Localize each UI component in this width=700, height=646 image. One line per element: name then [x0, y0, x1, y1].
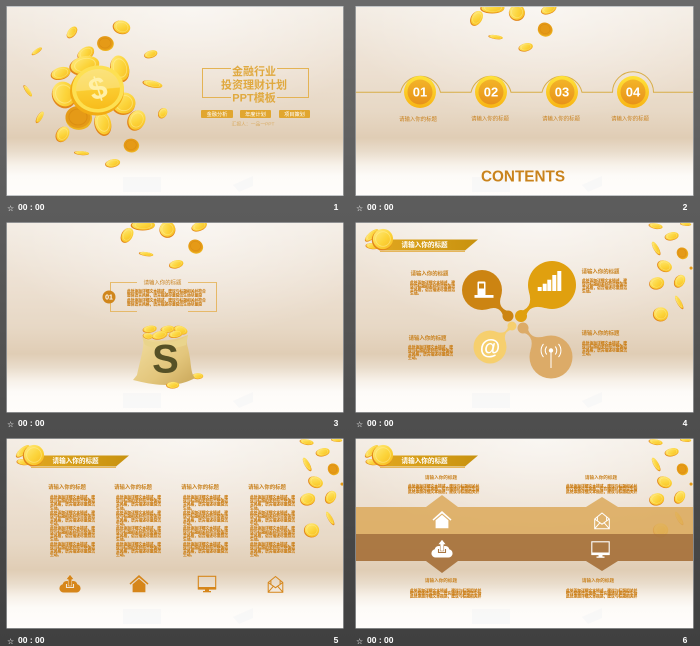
- footer slide 3: ☆: [7, 420, 14, 429]
- panel: slide 1 cover: [6, 6, 344, 197]
- bubble: at sign: @: [480, 336, 500, 360]
- text block top left: 生动。: [410, 290, 421, 296]
- footer slide 3: [7, 418, 339, 429]
- column 4 text: 言风格，语言描述尽量简洁: [250, 533, 295, 538]
- frame body text: 此处添加详细文本描述，建议与标题相关并符合: [127, 290, 206, 294]
- footer slide 6: [356, 635, 688, 646]
- column 2 text: 生动。: [116, 505, 127, 510]
- footer slide 3: 00 : 00: [18, 418, 45, 428]
- text block bottom right: [582, 329, 627, 356]
- item 02: 02: [484, 84, 498, 100]
- column 2 text: 生动。: [116, 536, 127, 542]
- text block top right: 符合整体语言风格，语言描述尽量简洁生动: [566, 486, 638, 491]
- item 04: [611, 76, 649, 122]
- text block top left: [408, 474, 480, 494]
- item 02: [471, 76, 509, 122]
- footer slide 6: 6: [683, 635, 688, 645]
- text block bottom left: 生动。: [408, 355, 419, 360]
- text block top left: 符合整体语言风格，语言描述尽量简洁生动: [408, 486, 480, 491]
- text block bottom left: 议与标题相关并符合整体语: [408, 348, 453, 353]
- column 4 text: 生动。: [250, 521, 261, 526]
- panel: slide 5 four columns: [6, 438, 344, 629]
- header ribbon: [363, 443, 478, 468]
- text block bottom right: 生动。: [582, 351, 593, 356]
- column 3 text: 议与标题相关并符合整体语: [183, 545, 228, 550]
- column 3 text: 生动。: [183, 552, 194, 557]
- item 01: 01: [413, 84, 427, 100]
- footer slide 1: 00 : 00: [18, 202, 45, 212]
- icon: money bag: [133, 324, 203, 389]
- column 2 text: 言风格，语言描述尽量简洁: [116, 548, 161, 554]
- column 2 text: 议与标题相关并符合整体语: [116, 529, 161, 534]
- text block bottom left: [410, 577, 482, 598]
- icon: home: [130, 575, 148, 592]
- column 3 text: 生动。: [183, 521, 194, 526]
- text block bottom right: 此处添加详细文本描述，建: [582, 342, 627, 346]
- text block bottom left: 此处添加详细文本描述，建: [408, 346, 453, 350]
- text block top right: 请输入你的标题: [582, 268, 620, 276]
- footer slide 4: ☆: [356, 420, 363, 429]
- text block top right: 此处添加详细文本描述，建议与标题相关并: [566, 484, 637, 488]
- column 4 text: 此处添加详细文本描述，建: [250, 541, 295, 546]
- text block bottom right: 此处添加详细文本描述，建议与标题相关并: [566, 589, 637, 593]
- text block top left: 此处添加详细文本描述，建: [410, 281, 455, 285]
- coin cluster illustration: $: [84, 69, 111, 108]
- icon: home: [432, 511, 452, 528]
- light band with diamonds: [356, 495, 693, 534]
- column 1 text: 议与标题相关并符合整体语: [50, 545, 95, 550]
- column 1 text: 言风格，语言描述尽量简洁: [50, 533, 95, 538]
- column 4 text: 议与标题相关并符合整体语: [250, 498, 295, 503]
- column 4 text: 言风格，语言描述尽量简洁: [250, 502, 295, 507]
- panel: slide 3 money bag: [6, 219, 344, 413]
- text block top right: 议与标题相关并符合整体语: [582, 282, 627, 286]
- text block top right: 此处添加详细文本描述，建: [582, 279, 627, 283]
- cover title box: 金融行业: [232, 64, 276, 78]
- column 3 text: 言风格，语言描述尽量简洁: [183, 533, 228, 538]
- column 3 text: [181, 483, 228, 557]
- column 3 text: 言风格，语言描述尽量简洁: [183, 502, 228, 507]
- item 04: 04: [626, 84, 641, 100]
- text block top left: 言风格，语言描述尽量简洁: [410, 287, 455, 292]
- text block top left: 议与标题相关并符合整体语: [410, 284, 455, 288]
- corner coins: [648, 438, 693, 539]
- cover title box: PPT模板: [232, 90, 276, 104]
- text block top right: 言风格，语言描述尽量简洁: [582, 285, 627, 290]
- header ribbon: 请输入你的标题: [402, 240, 448, 249]
- column 2 text: 言风格，语言描述尽量简洁: [116, 533, 161, 538]
- column 1 text: 议与标题相关并符合整体语: [50, 529, 95, 534]
- column 2 text: 请输入你的标题: [114, 483, 152, 491]
- column 1 text: 议与标题相关并符合整体语: [50, 498, 95, 503]
- bubble: phone: [462, 270, 514, 322]
- column 4 text: [248, 483, 295, 557]
- panel: slide 2 contents: [356, 2, 694, 197]
- bubble: signal bars: [515, 261, 576, 322]
- footer slide 3: 3: [334, 418, 339, 428]
- header ribbon: 请输入你的标题: [52, 456, 99, 465]
- column 4 text: 请输入你的标题: [248, 483, 286, 491]
- column 3 text: 言风格，语言描述尽量简洁: [183, 517, 228, 522]
- column 1 text: [48, 483, 95, 557]
- column 1 text: 此处添加详细文本描述，建: [50, 541, 95, 546]
- heading: contents: CONTENTS: [481, 168, 565, 186]
- dark band with diamonds: [356, 534, 693, 573]
- column 1 text: 生动。: [50, 536, 61, 542]
- footer slide 2: 00 : 00: [367, 202, 394, 212]
- frame body text: 此处添加详细文本描述，建议与标题相关并符合: [127, 298, 206, 302]
- corner coins: [648, 222, 693, 323]
- frame body text: 整体语言风格，语言描述尽量简洁生动尽量简: [127, 302, 202, 307]
- column 2 text: [114, 483, 161, 557]
- column 1 text: 生动。: [50, 552, 61, 557]
- icon: envelope: [595, 513, 609, 529]
- column 4 text: 此处添加详细文本描述，建: [250, 510, 295, 515]
- text block top left: 此处添加详细文本描述，建议与标题相关并: [408, 489, 480, 494]
- column 2 text: 此处添加详细文本描述，建: [116, 541, 161, 546]
- falling coins: [468, 2, 558, 53]
- footer slide 6: 00 : 00: [367, 635, 394, 645]
- footer slide 5: 5: [334, 635, 339, 645]
- column 3 text: 此处添加详细文本描述，建: [183, 496, 228, 500]
- column 4 text: 生动。: [250, 552, 261, 557]
- column 2 text: 议与标题相关并符合整体语: [116, 545, 161, 550]
- column 1 text: 生动。: [50, 521, 61, 526]
- item 04: 请输入你的标题: [611, 114, 649, 122]
- footer slide 5: 00 : 00: [18, 635, 45, 645]
- bubble: antenna: [518, 322, 572, 378]
- text block bottom left: [408, 334, 453, 360]
- column 4 text: 言风格，语言描述尽量简洁: [250, 517, 295, 522]
- footer slide 4: [356, 418, 688, 429]
- text block top right: 请输入你的标题: [585, 474, 617, 481]
- cover tag pills: 年度计划: [245, 110, 266, 118]
- icon: monitor: [592, 542, 610, 558]
- coin cluster illustration: [22, 18, 169, 169]
- column 3 text: 议与标题相关并符合整体语: [183, 498, 228, 503]
- column 4 text: 议与标题相关并符合整体语: [250, 545, 295, 550]
- column 1 text: 生动。: [50, 505, 61, 510]
- falling coins: [118, 219, 208, 270]
- text block bottom left: 言风格，语言描述尽量简洁: [408, 352, 453, 356]
- footer slide 2: 2: [683, 202, 688, 212]
- column 2 text: 此处添加详细文本描述，建: [116, 496, 161, 500]
- text block bottom right: [566, 577, 638, 598]
- cover tag pills: 金融分析: [207, 110, 227, 118]
- text block top left: 请输入你的标题: [411, 270, 449, 278]
- text block bottom right: 此处添加详细文本描述，建议与标题相关并: [566, 593, 638, 598]
- number badge: [102, 290, 116, 304]
- column 2 text: 生动。: [116, 552, 127, 557]
- text block top left: 请输入你的标题: [425, 474, 457, 481]
- column 3 text: 生动。: [183, 505, 194, 510]
- column 3 text: 此处添加详细文本描述，建: [183, 510, 228, 515]
- column 2 text: 议与标题相关并符合整体语: [116, 514, 161, 519]
- text block bottom right: 请输入你的标题: [582, 577, 614, 584]
- text block bottom right: 言风格，语言描述尽量简洁: [582, 348, 627, 352]
- text block top right: 生动。: [582, 288, 593, 294]
- cover tag pills: [201, 110, 310, 118]
- footer slide 1: [7, 202, 339, 213]
- text block bottom right: 议与标题相关并符合整体语: [582, 344, 627, 349]
- number badge: 01: [105, 294, 113, 302]
- text block bottom right: 符合整体语言风格，语言描述尽量简洁生动: [566, 591, 638, 596]
- column 3 text: 此处添加详细文本描述，建: [183, 526, 228, 531]
- panel: slide 6 bands: [356, 438, 694, 629]
- text block bottom left: 请输入你的标题: [425, 577, 457, 584]
- text block bottom left: 此处添加详细文本描述，建议与标题相关并: [410, 593, 482, 598]
- column 4 text: 生动。: [250, 536, 261, 542]
- cover title box: 投资理财计划: [221, 78, 287, 92]
- column 3 text: 议与标题相关并符合整体语: [183, 514, 228, 519]
- header ribbon: [14, 443, 129, 468]
- column 3 text: 言风格，语言描述尽量简洁: [183, 548, 228, 554]
- column 1 text: 请输入你的标题: [48, 483, 86, 491]
- text block top right: [566, 474, 638, 494]
- corner coins: [299, 438, 344, 539]
- footer slide 1: 1: [334, 202, 339, 212]
- icon: cloud upload: [59, 574, 81, 592]
- icon: monitor: [198, 576, 216, 592]
- footer slide 5: ☆: [7, 637, 14, 646]
- column 2 text: 言风格，语言描述尽量简洁: [116, 502, 161, 507]
- column 2 text: 此处添加详细文本描述，建: [116, 510, 161, 515]
- column 2 text: 此处添加详细文本描述，建: [116, 526, 161, 531]
- item 03: 请输入你的标题: [542, 114, 580, 122]
- icon: envelope: [268, 576, 283, 592]
- footer slide 5: [7, 635, 339, 646]
- frame title: 请输入你的标题: [144, 278, 182, 286]
- cover title box: [202, 64, 308, 104]
- icon: cloud upload: [431, 540, 453, 558]
- text block top left: 此处添加详细文本描述，建议与标题相关并: [408, 484, 479, 488]
- column 1 text: 此处添加详细文本描述，建: [50, 526, 95, 531]
- icon: money bag: S: [152, 338, 179, 382]
- column 4 text: 生动。: [250, 505, 261, 510]
- header ribbon: [363, 227, 478, 252]
- text block bottom left: 请输入你的标题: [409, 334, 447, 342]
- item 02: 请输入你的标题: [471, 114, 509, 122]
- column 3 text: 请输入你的标题: [181, 483, 219, 491]
- item 03: 03: [555, 84, 569, 100]
- header ribbon: 请输入你的标题: [402, 456, 448, 465]
- text block top left: [410, 270, 455, 296]
- column 3 text: 议与标题相关并符合整体语: [183, 529, 228, 534]
- column 2 text: 言风格，语言描述尽量简洁: [116, 517, 161, 522]
- column 1 text: 此处添加详细文本描述，建: [50, 496, 95, 500]
- item 03: [542, 76, 580, 122]
- text block bottom left: 符合整体语言风格，语言描述尽量简洁生动: [410, 591, 482, 596]
- text block top right: [582, 268, 627, 294]
- text block bottom right: 请输入你的标题: [582, 329, 620, 337]
- item 01: 请输入你的标题: [399, 115, 437, 123]
- column 1 text: 言风格，语言描述尽量简洁: [50, 548, 95, 554]
- frame body text: 整体语言风格，语言描述尽量简洁生动尽量简: [127, 293, 202, 298]
- column 2 text: 生动。: [116, 521, 127, 526]
- presenter line: 汇报人：一品一PPT: [232, 120, 275, 128]
- column 1 text: 此处添加详细文本描述，建: [50, 510, 95, 515]
- footer slide 4: 00 : 00: [367, 418, 394, 428]
- column 4 text: 此处添加详细文本描述，建: [250, 526, 295, 531]
- timeline line with arcs: [356, 72, 693, 92]
- bubble: at sign: [474, 322, 516, 364]
- cover tag pills: 项目策划: [284, 110, 305, 118]
- footer slide 2: ☆: [356, 204, 363, 213]
- column 4 text: 议与标题相关并符合整体语: [250, 514, 295, 519]
- column 1 text: 言风格，语言描述尽量简洁: [50, 517, 95, 522]
- footer slide 1: ☆: [7, 204, 14, 213]
- text block bottom left: 此处添加详细文本描述，建议与标题相关并: [410, 589, 481, 593]
- item 01: [399, 76, 437, 123]
- text block top right: 此处添加详细文本描述，建议与标题相关并: [566, 489, 638, 494]
- column 2 text: 议与标题相关并符合整体语: [116, 498, 161, 503]
- footer slide 2: [356, 202, 688, 213]
- panel: slide 4 bubble diagram: [356, 222, 694, 413]
- column 4 text: 此处添加详细文本描述，建: [250, 496, 295, 500]
- text frame: [110, 282, 216, 312]
- column 4 text: 言风格，语言描述尽量简洁: [250, 548, 295, 554]
- footer slide 4: 4: [683, 418, 688, 428]
- footer slide 6: ☆: [356, 637, 363, 646]
- column 4 text: 议与标题相关并符合整体语: [250, 529, 295, 534]
- column 3 text: 生动。: [183, 536, 194, 542]
- column 3 text: 此处添加详细文本描述，建: [183, 541, 228, 546]
- column 1 text: 言风格，语言描述尽量简洁: [50, 502, 95, 507]
- column 1 text: 议与标题相关并符合整体语: [50, 514, 95, 519]
